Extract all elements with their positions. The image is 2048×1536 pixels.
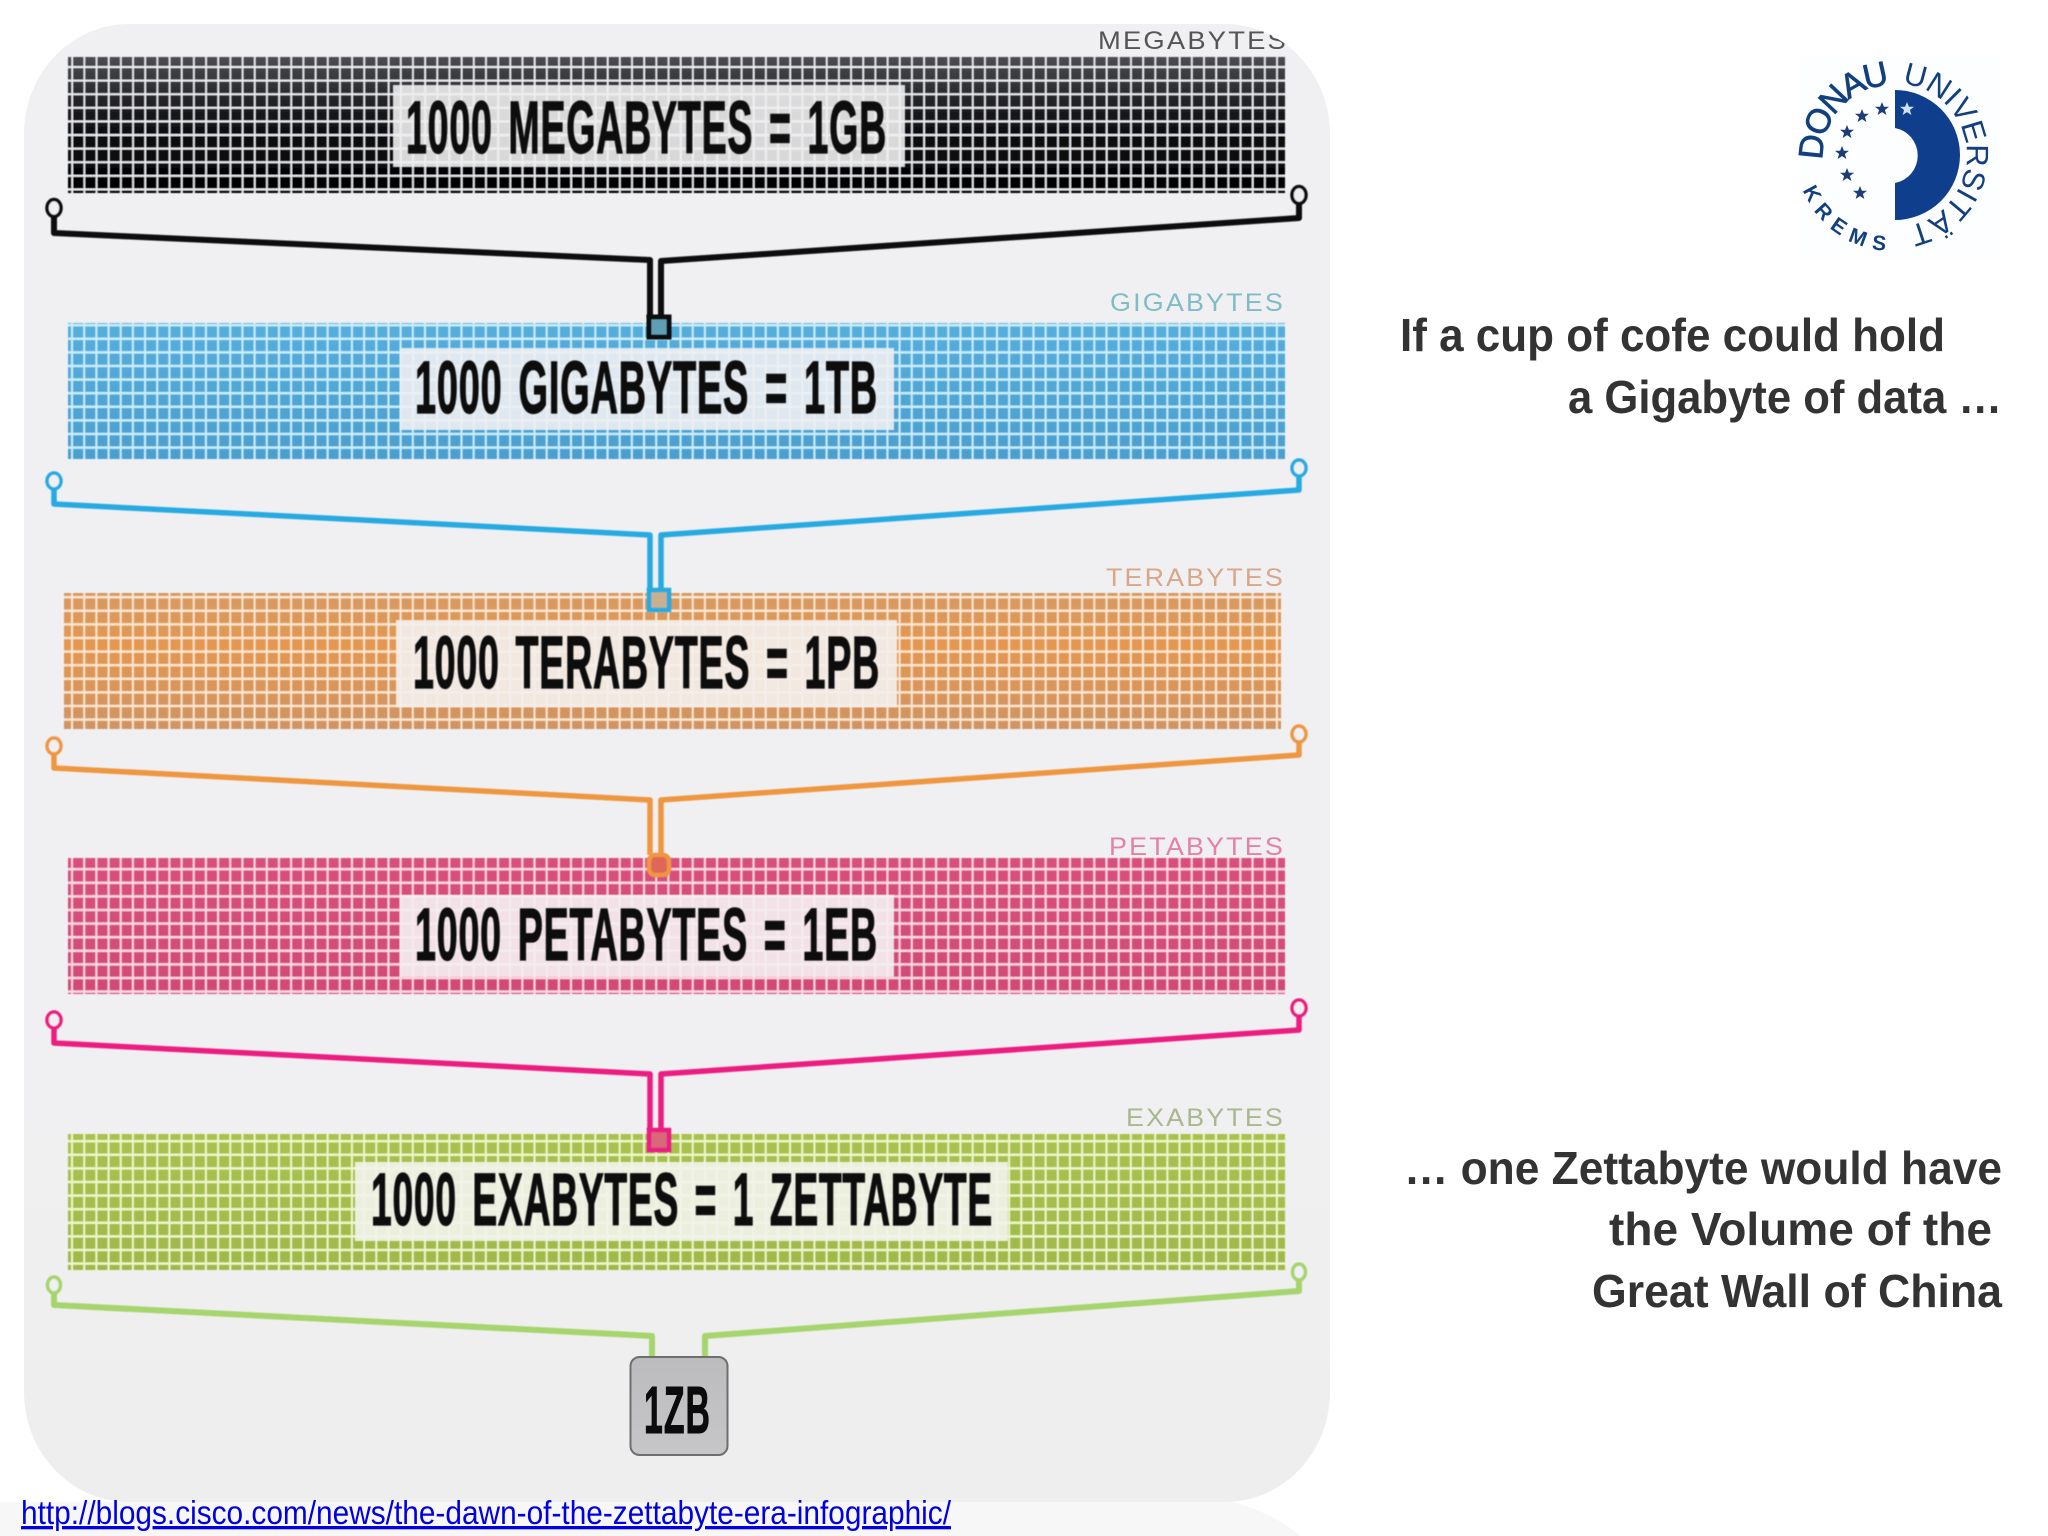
label: exabytes: EXABYTES bbox=[1126, 1104, 1285, 1132]
data grid: megabytes bbox=[68, 57, 1285, 193]
label: gigabytes: GIGABYTES bbox=[1110, 289, 1285, 317]
tier: gigabytes bbox=[68, 289, 1285, 459]
chip: 1ZB bbox=[630, 1357, 728, 1455]
text: coffee comparison bbox=[1400, 309, 2002, 423]
connector square on grid: black bbox=[649, 317, 669, 337]
tier: megabytes bbox=[68, 27, 1288, 193]
logo wordmark: DONAU bbox=[1798, 61, 1886, 158]
text: great wall comparison bbox=[1404, 1142, 2002, 1317]
equation: 1000 gigabytes = 1TB bbox=[400, 346, 894, 430]
data grid: terabytes bbox=[64, 593, 1281, 729]
equation: 1000 exabytes = 1 zettabyte bbox=[355, 1158, 1008, 1241]
connector: terabytes to petabytes bbox=[47, 726, 1306, 855]
connector square on grid: blue bbox=[649, 590, 669, 610]
equation: 1000 terabytes = 1PB: 1000 TERABYTES = 1PB bbox=[413, 621, 880, 704]
data grid: petabytes bbox=[68, 858, 1285, 994]
connector: gigabytes to terabytes bbox=[47, 460, 1306, 590]
label: megabytes: MEGABYTES bbox=[1098, 27, 1288, 55]
panel: infographic background bbox=[24, 24, 1330, 1502]
equation: 1000 petabytes = 1EB: 1000 PETABYTES = 1EB bbox=[415, 893, 878, 976]
tier: petabytes bbox=[68, 833, 1285, 994]
text: great wall comparison: the Volume of the bbox=[1609, 1203, 1992, 1255]
connector: exabytes to 1ZB bbox=[48, 1264, 1306, 1358]
logo stars bbox=[1835, 102, 1889, 199]
lower page band bbox=[0, 1502, 1300, 1536]
label: petabytes: PETABYTES bbox=[1109, 833, 1285, 861]
data grid: exabytes bbox=[68, 1134, 1285, 1270]
equation: 1000 megabytes = 1GB bbox=[393, 85, 905, 169]
logo crescent bbox=[1895, 90, 1960, 220]
source link: http://blogs.cisco.com/news/the-dawn-of-the-zettabyte-era-infographic/ bbox=[21, 1494, 952, 1531]
equation: 1000 petabytes = 1EB bbox=[400, 893, 894, 977]
data grid: gigabytes bbox=[68, 323, 1285, 459]
equation: 1000 megabytes = 1GB: 1000 MEGABYTES = 1GB bbox=[406, 86, 887, 169]
logo: Donau Universität Krems bbox=[1798, 61, 1988, 250]
connector: petabytes to exabytes bbox=[47, 1000, 1306, 1130]
text: great wall comparison: Great Wall of China bbox=[1592, 1265, 2002, 1317]
logo wordmark bbox=[1798, 61, 1988, 250]
connector square on grid: pink bbox=[649, 1130, 669, 1150]
tier: exabytes bbox=[68, 1104, 1285, 1270]
logo wordmark: UNIVERSITÄT bbox=[1906, 62, 1988, 247]
text: coffee comparison: a Gigabyte of data … bbox=[1568, 371, 2002, 423]
equation: 1000 exabytes = 1 zettabyte: 1000 EXABYTES = 1 ZETTABYTE bbox=[371, 1158, 993, 1241]
text: coffee comparison: If a cup of cofe could hold bbox=[1400, 309, 1945, 361]
tier: terabytes bbox=[64, 564, 1285, 729]
chip: 1ZB: 1ZB bbox=[644, 1373, 711, 1448]
text: great wall comparison: … one Zettabyte would have bbox=[1404, 1142, 2002, 1194]
equation: 1000 terabytes = 1PB bbox=[396, 620, 897, 707]
equation: 1000 gigabytes = 1TB: 1000 GIGABYTES = 1TB bbox=[415, 346, 878, 429]
label: terabytes: TERABYTES bbox=[1106, 564, 1285, 592]
connector square on grid: orange bbox=[649, 855, 669, 875]
logo wordmark: KREMS bbox=[1803, 184, 1886, 250]
connector: megabytes to gigabytes bbox=[47, 186, 1306, 318]
